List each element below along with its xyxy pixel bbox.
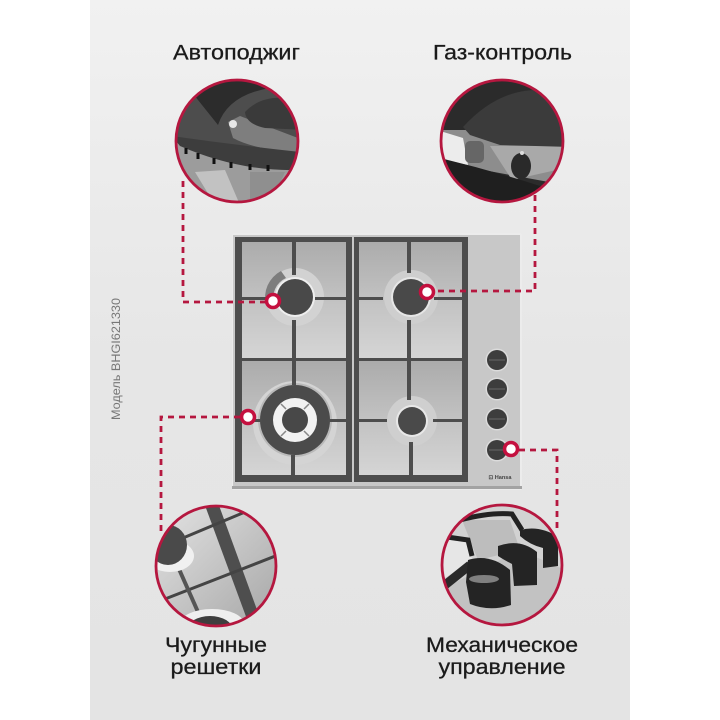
control knobs bbox=[486, 348, 508, 462]
heading: Газ-контроль: Газ-контроль bbox=[433, 40, 572, 64]
heading: Чугунные решетки: Чугунные bbox=[165, 633, 267, 657]
dashed connector: knobs bbox=[519, 450, 557, 532]
burner: bottom-left large bbox=[253, 381, 337, 465]
photo circle: mechanical knobs bbox=[440, 503, 565, 630]
photo circle: cast iron grates bbox=[154, 504, 278, 628]
background panel bbox=[90, 0, 630, 720]
marker: ignition bbox=[266, 294, 280, 308]
dashed connector: gas control bbox=[435, 195, 535, 291]
burner: top-right bbox=[384, 270, 438, 324]
dashed connector: grates bbox=[161, 417, 240, 535]
heading: Автоподжиг: Автоподжиг bbox=[173, 40, 300, 64]
heading: Механическое управление: Механическое bbox=[426, 633, 578, 657]
heading: Механическое управление: управление bbox=[438, 655, 566, 679]
heading: Чугунные решетки bbox=[165, 633, 267, 679]
brand label: ⊡ Hansa bbox=[488, 475, 512, 481]
hob panel bbox=[232, 233, 522, 490]
photo circle: gas control bbox=[440, 78, 570, 205]
photo circle: ignition bbox=[174, 78, 300, 204]
heading: Механическое управление bbox=[426, 633, 578, 679]
marker: grates bbox=[242, 410, 254, 424]
model label: Модель BHGI621330 bbox=[109, 298, 123, 420]
burner: top-left bbox=[265, 268, 324, 326]
marker: gas control bbox=[420, 286, 434, 298]
dashed connector: ignition bbox=[183, 181, 266, 302]
marker: knobs bbox=[504, 442, 518, 456]
burner: bottom-right bbox=[387, 396, 437, 446]
cast iron grates bbox=[235, 237, 468, 482]
heading: Чугунные решетки: решетки bbox=[170, 655, 262, 679]
